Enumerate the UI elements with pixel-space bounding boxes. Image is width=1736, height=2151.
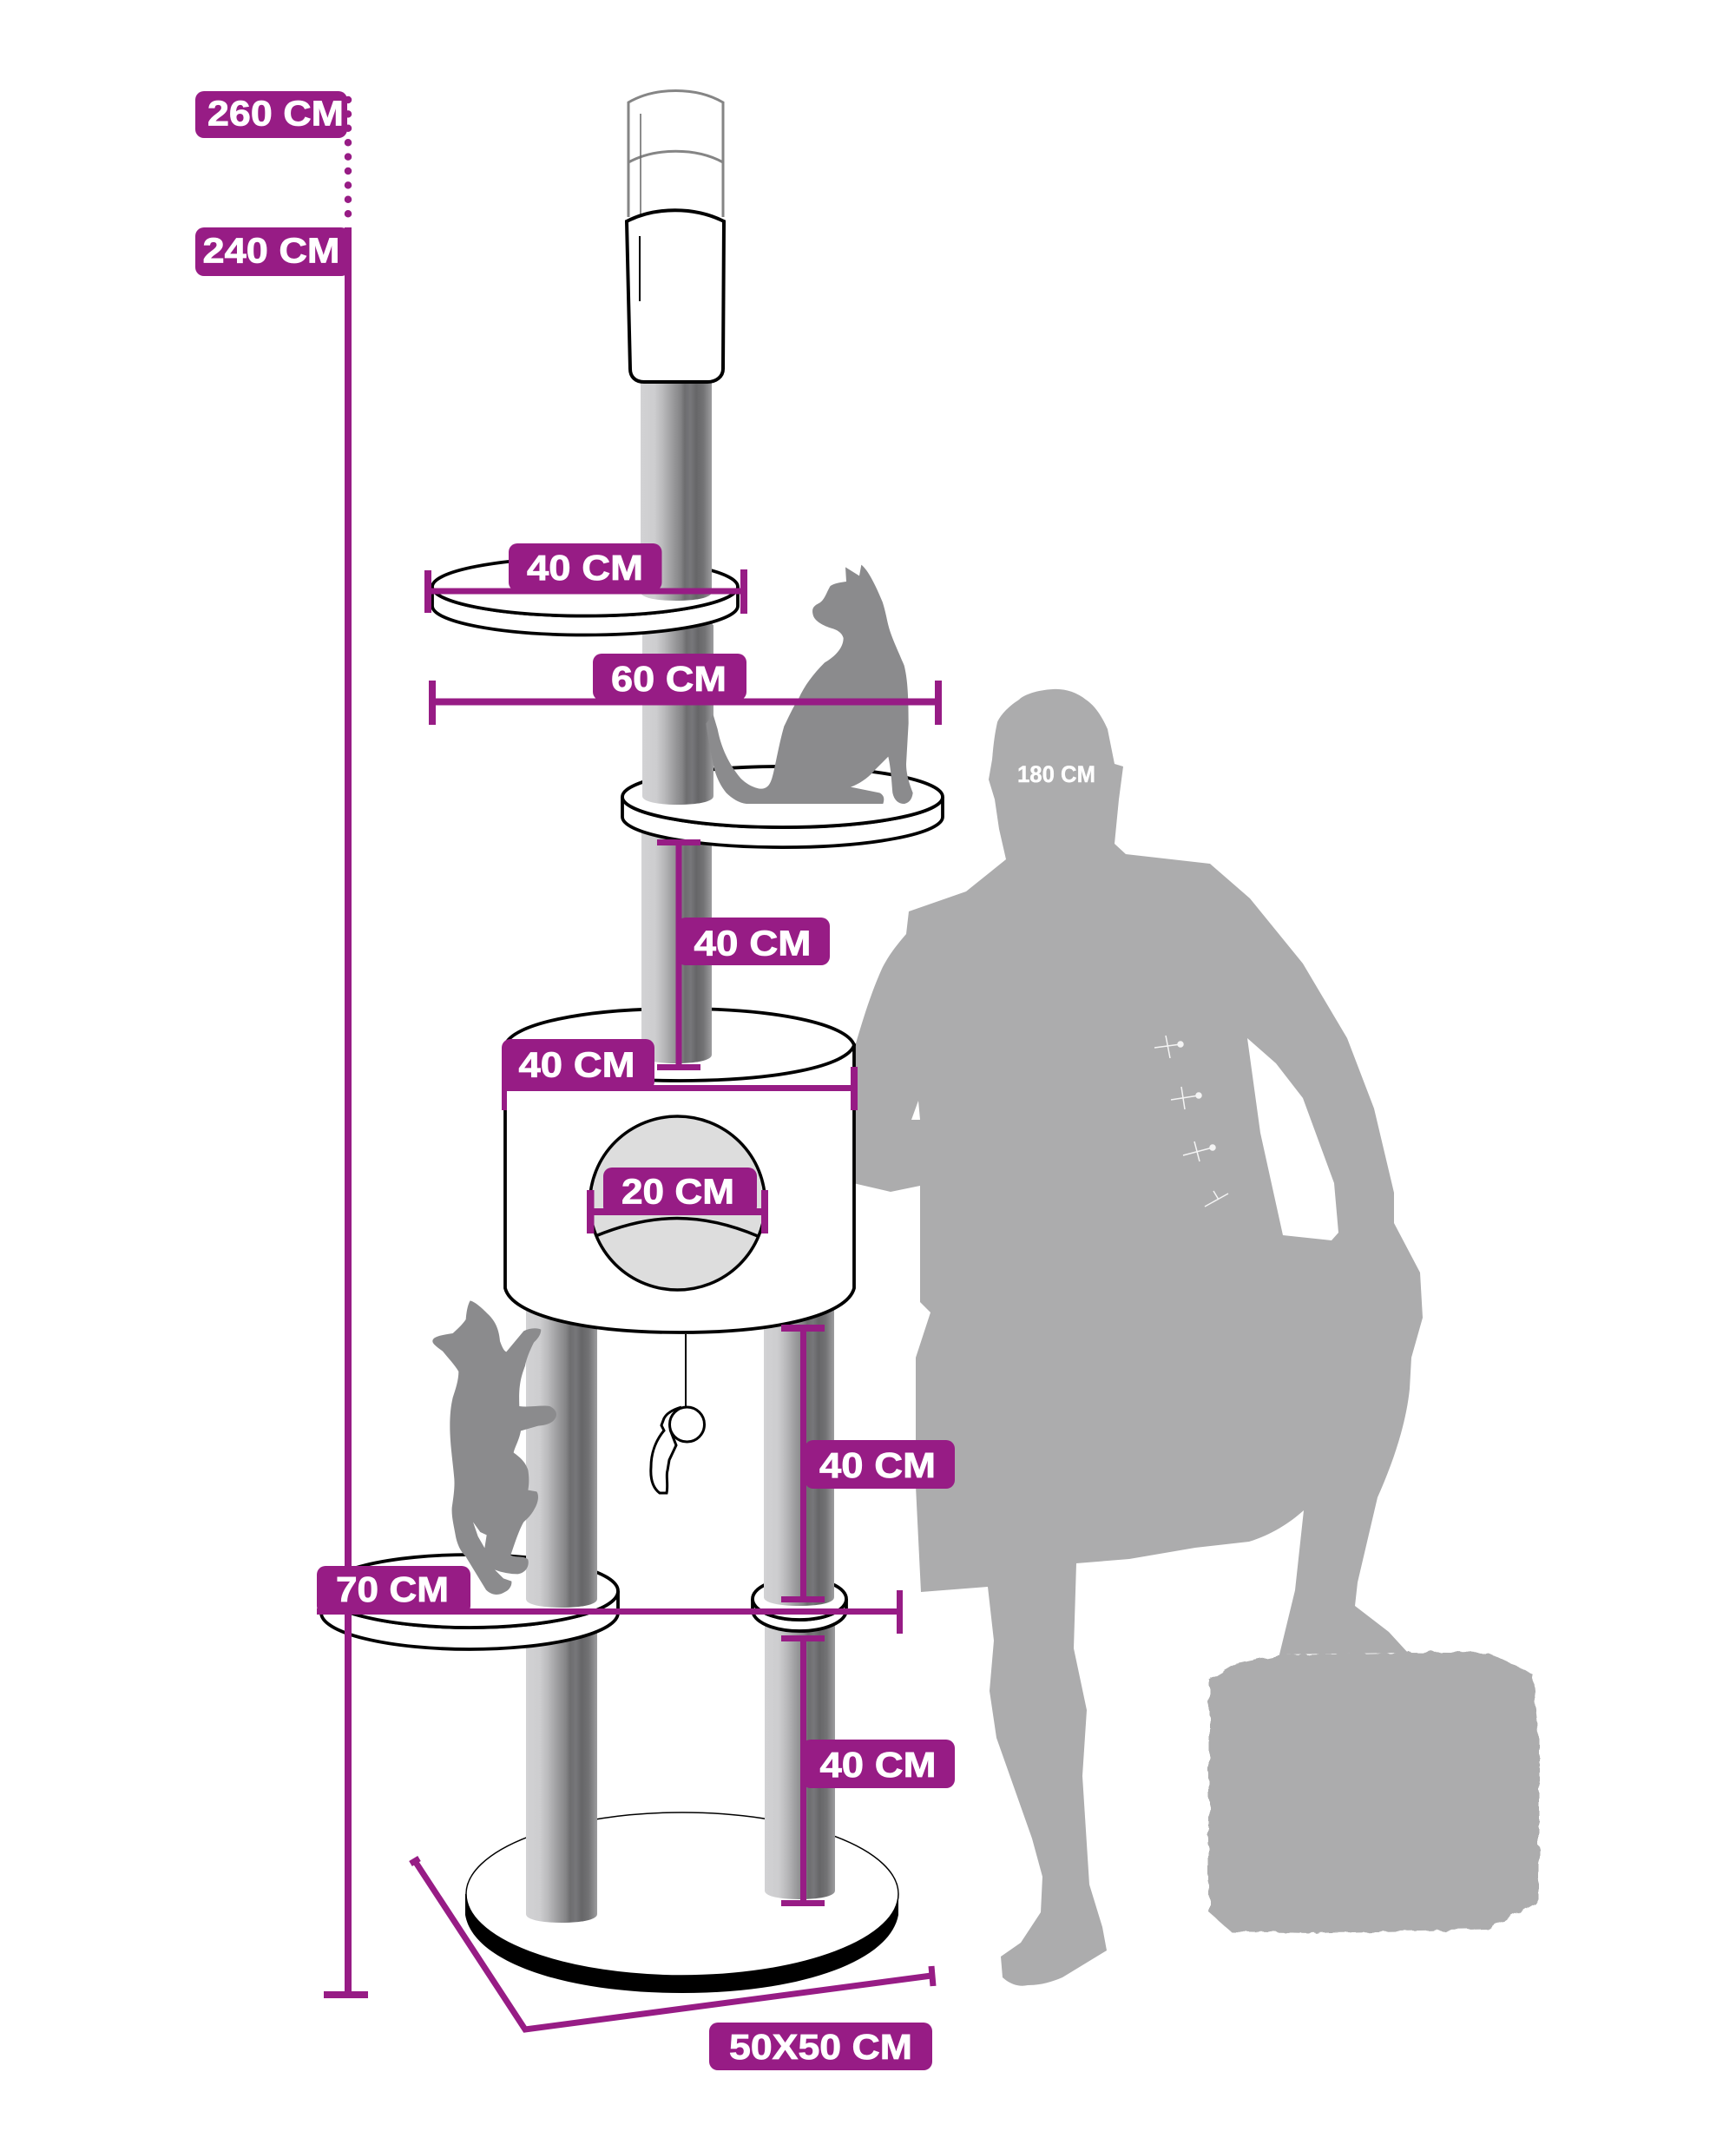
dimension lower width xyxy=(317,1566,903,1634)
label 40 cm: 40 CM xyxy=(527,548,643,588)
top post xyxy=(641,373,712,601)
solid tube cap xyxy=(627,210,724,382)
man shirt detail xyxy=(1154,1036,1228,1207)
sitting cat xyxy=(706,565,913,804)
label 70 cm xyxy=(317,1566,470,1615)
right ring xyxy=(753,1578,846,1631)
dimension post height middle xyxy=(781,1325,955,1602)
shelf 1 xyxy=(432,557,738,635)
label 260 cm xyxy=(195,91,347,138)
label 260 cm: 260 CM xyxy=(207,94,344,134)
label 40 cm xyxy=(802,1740,955,1788)
hanging toy xyxy=(651,1334,705,1493)
base disc xyxy=(465,1812,898,1993)
label 40 cm: 40 CM xyxy=(694,924,811,964)
label 40 cm: 40 CM xyxy=(819,1445,936,1485)
left shelf xyxy=(321,1555,618,1649)
hanging house xyxy=(505,1009,854,1332)
shelf 2 xyxy=(622,766,943,847)
label 20 cm xyxy=(603,1168,757,1215)
post below shelf 1 xyxy=(642,599,713,816)
left lower post xyxy=(526,1632,597,1923)
label 60 cm: 60 CM xyxy=(611,659,727,699)
right upper post xyxy=(764,1302,834,1606)
label 50x50 cm xyxy=(709,2023,932,2070)
telescopic top tube xyxy=(627,90,724,382)
climbing cat xyxy=(432,1300,556,1595)
right lower post xyxy=(765,1623,835,1899)
left upper post xyxy=(526,1302,597,1608)
post between shelf 2 and house xyxy=(641,833,712,1063)
label 50x50 cm: 50X50 CM xyxy=(729,2027,912,2067)
dimension shelf 1 xyxy=(424,543,747,614)
label 40 cm: 40 CM xyxy=(819,1745,936,1785)
label 40 cm xyxy=(677,918,830,965)
post through house top xyxy=(641,911,712,1063)
label 70 cm: 70 CM xyxy=(336,1569,449,1609)
label 20 cm: 20 CM xyxy=(621,1172,734,1212)
dimension house width xyxy=(502,1039,858,1110)
label 240 cm xyxy=(195,227,350,276)
post on shelf 2 xyxy=(642,625,713,805)
dimension opening xyxy=(587,1168,768,1233)
label 60 cm xyxy=(593,654,746,701)
label 240 cm: 240 CM xyxy=(203,231,340,271)
house opening xyxy=(590,1116,766,1290)
dimension shelf 2 xyxy=(429,654,942,725)
height line 240 cm xyxy=(324,227,368,1998)
man height label: 180 CM xyxy=(1017,761,1095,787)
label 40 cm xyxy=(502,1039,654,1090)
man silhouette xyxy=(853,689,1423,1986)
bottom end tick xyxy=(324,1991,368,1998)
dimension post height upper xyxy=(657,839,830,1070)
pouf xyxy=(1209,1652,1539,1933)
label 40 cm xyxy=(509,543,661,591)
label 40 cm: 40 CM xyxy=(519,1045,635,1085)
height dots 260 cm xyxy=(345,100,352,227)
dimension post height lower xyxy=(781,1635,955,1906)
label 40 cm xyxy=(805,1440,955,1489)
ghost extended tube xyxy=(628,90,723,219)
man arm gap xyxy=(911,1101,920,1120)
dimension base footprint xyxy=(411,1858,933,2070)
